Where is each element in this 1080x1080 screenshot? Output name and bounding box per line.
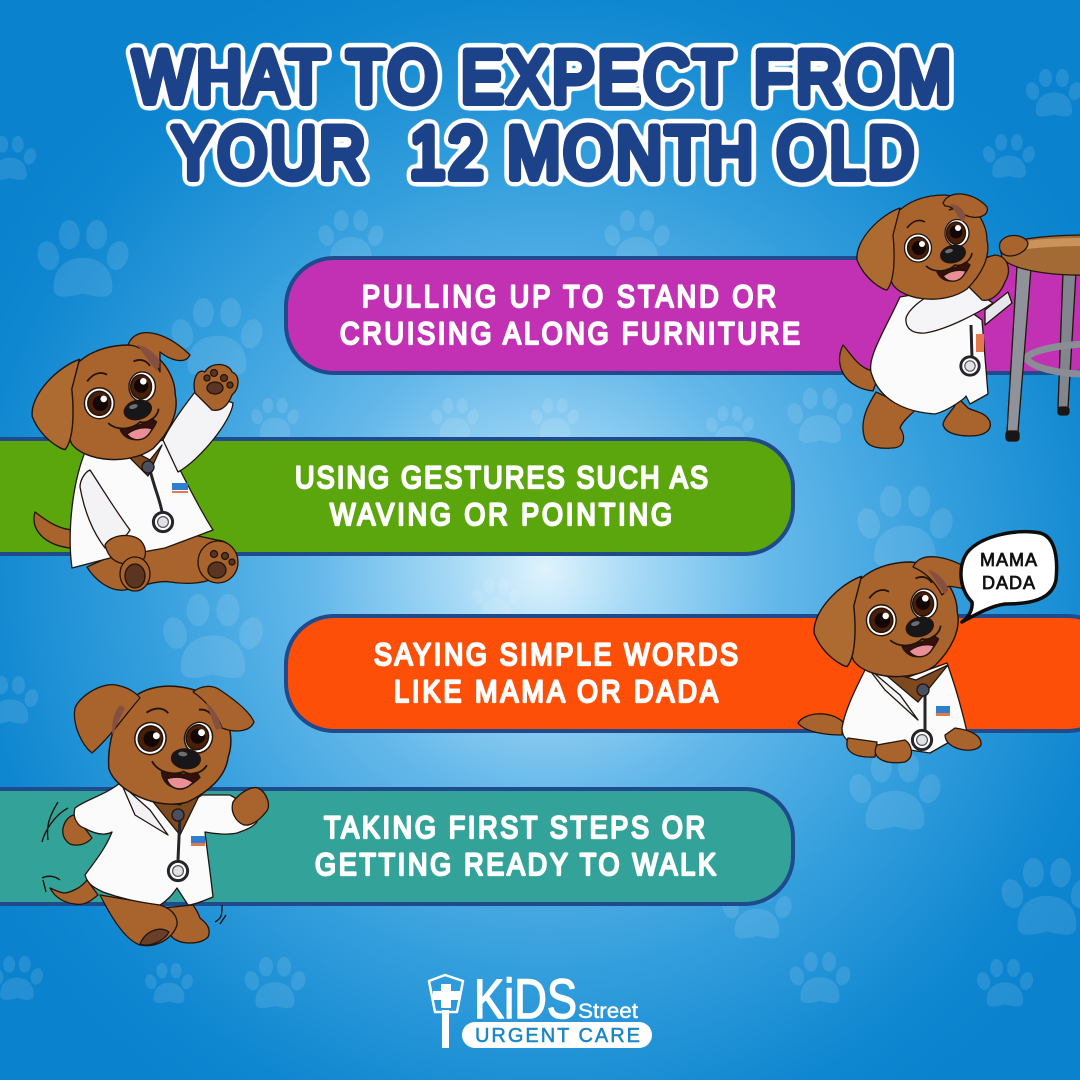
panel: first steps: GETTING READY TO WALK — [315, 847, 716, 883]
icon: puppy taking first steps — [42, 668, 268, 946]
callout: speech bubble mama dada — [961, 532, 1057, 622]
panel: simple words — [286, 616, 1080, 731]
icon: puppy waving — [32, 333, 238, 591]
panel: pulling up to stand: PULLING UP TO STAND OR — [362, 279, 776, 315]
icon: puppy saying mama dada — [798, 557, 981, 763]
panel: simple words: SAYING SIMPLE WORDS — [374, 637, 738, 673]
title: YOUR 12 MONTH OLD — [172, 112, 914, 194]
panel: first steps — [0, 789, 793, 904]
panel: pulling up to stand — [286, 258, 1080, 373]
icon: lamp post — [429, 975, 463, 1048]
panel: gestures: WAVING OR POINTING — [330, 497, 672, 533]
callout: speech bubble mama dada: DADA — [982, 573, 1036, 593]
panel: gestures — [0, 439, 793, 554]
head — [857, 194, 988, 299]
head — [32, 333, 190, 460]
panel: gestures: USING GESTURES SUCH AS — [295, 460, 708, 496]
panel: pulling up to stand: CRUISING ALONG FURNITURE — [340, 316, 800, 352]
logo: Kids Street Urgent Care — [429, 967, 652, 1048]
text: Street: Street — [578, 1000, 638, 1023]
title — [133, 36, 951, 194]
head — [814, 557, 978, 677]
text: KiDS wordmark: KiDS — [474, 967, 577, 1030]
icon: puppy pulling up on stool — [840, 194, 1080, 448]
title: WHAT TO EXPECT FROM — [133, 36, 951, 118]
stool — [1000, 235, 1080, 441]
panel: first steps: TAKING FIRST STEPS OR — [324, 810, 705, 846]
panel: simple words: LIKE MAMA OR DADA — [394, 674, 718, 710]
badge: urgent care: URGENT CARE — [475, 1025, 640, 1047]
callout: speech bubble mama dada: MAMA — [980, 550, 1038, 570]
head — [74, 668, 254, 821]
